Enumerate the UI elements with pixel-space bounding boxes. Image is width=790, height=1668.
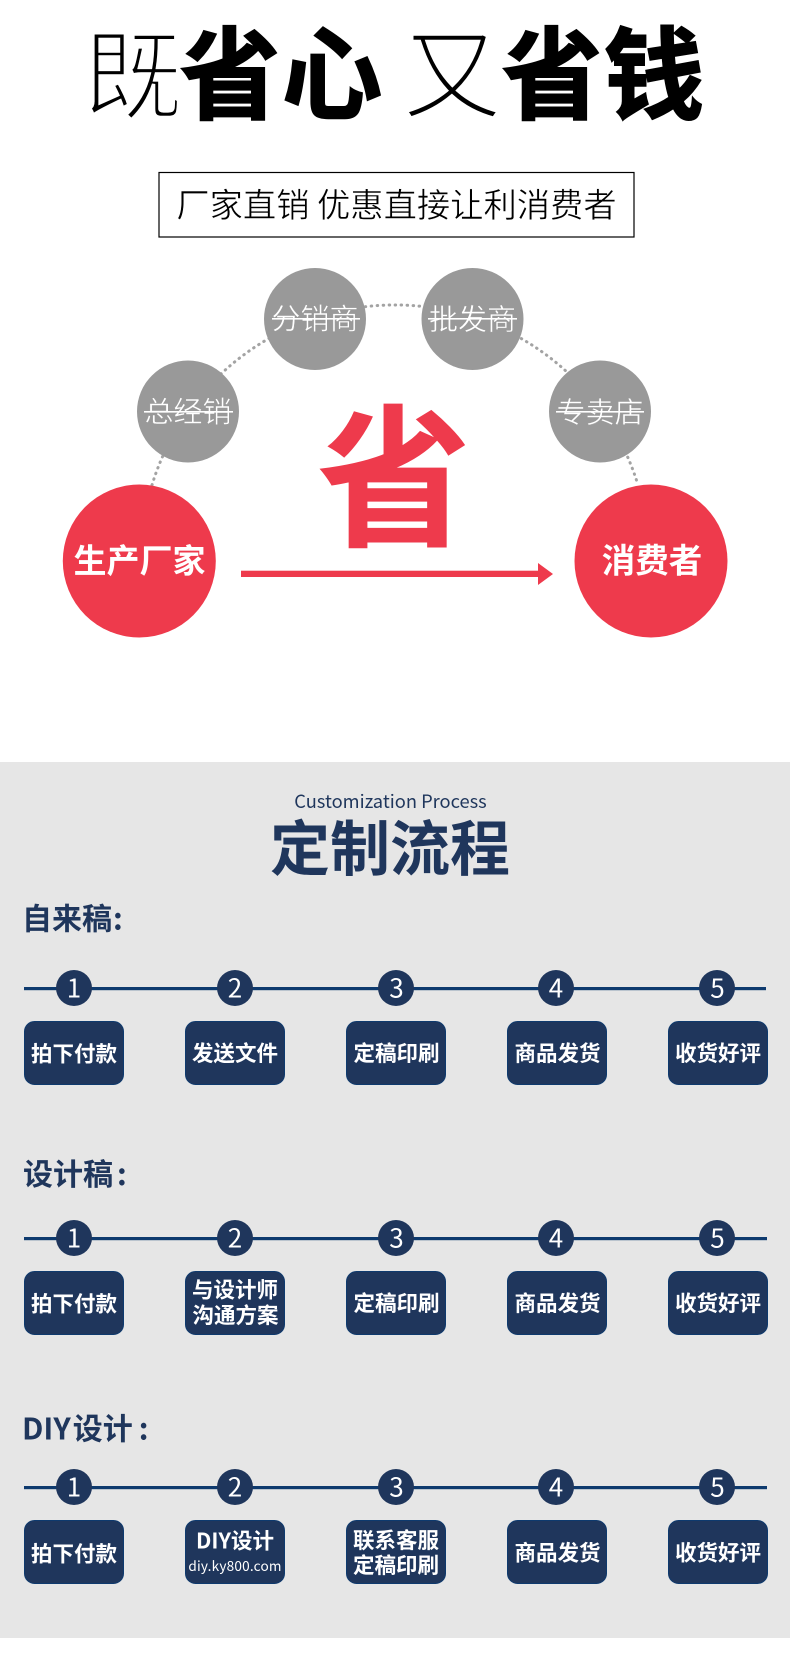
row 1 timeline: 2 <box>228 968 242 1006</box>
row 2 timeline: 1 <box>67 1218 81 1256</box>
circle: 总经销 <box>137 360 239 462</box>
row 1 steps: 发送文件 <box>192 1037 278 1068</box>
row 3 steps: 商品发货 <box>514 1536 601 1568</box>
circle: 总经销: 总经销 <box>144 389 232 431</box>
row 3 steps: 定稿印刷 <box>353 1549 439 1580</box>
row 2 steps: 收货好评 <box>675 1287 761 1318</box>
row 3 title: DIY设计: <box>22 1404 148 1448</box>
row 2 steps: 与设计师 <box>192 1274 278 1304</box>
panel: customization process <box>0 762 790 1638</box>
row 1 timeline: 3 <box>389 968 404 1006</box>
row 3 steps <box>24 1520 768 1584</box>
row 3 timeline: 1 <box>67 1468 81 1504</box>
row 1 timeline: 4 <box>549 968 563 1006</box>
title <box>83 0 704 140</box>
big character 省: 省 <box>317 358 471 579</box>
row 2 timeline: 4 <box>549 1218 563 1256</box>
row 3 timeline <box>24 1468 767 1505</box>
row 1 timeline: 1 <box>67 968 81 1006</box>
row 2 steps: 沟通方案 <box>192 1299 279 1330</box>
circle: 分销商 <box>264 268 366 370</box>
row 1 timeline: 5 <box>710 968 725 1006</box>
circle: 消费者 <box>574 484 728 638</box>
row 2 steps: 拍下付款 <box>31 1288 117 1318</box>
row 2 timeline <box>24 1218 767 1256</box>
row 1 title: 自来稿: <box>22 894 123 938</box>
diagram: dotted arc <box>152 305 638 485</box>
row 3 steps: DIY设计 <box>196 1524 274 1556</box>
subtitle box: 厂家直销 优惠直接让利消费者 <box>176 178 617 227</box>
row 1 timeline <box>24 968 766 1006</box>
heading: 定制流程 <box>270 802 510 888</box>
row 1 steps: 定稿印刷 <box>353 1037 440 1068</box>
row 2 timeline: 2 <box>228 1218 242 1256</box>
row 3 steps: 收货好评 <box>675 1536 761 1568</box>
circle: 消费者: 消费者 <box>602 534 702 582</box>
row 1 steps: 拍下付款 <box>31 1038 117 1068</box>
arrow <box>241 563 553 585</box>
row 3 timeline: 4 <box>549 1468 563 1504</box>
row 3 steps: 拍下付款 <box>31 1538 117 1568</box>
row 1 steps: 收货好评 <box>675 1037 761 1068</box>
row 3 timeline: 5 <box>710 1468 725 1504</box>
row 2 steps: 定稿印刷 <box>353 1287 440 1318</box>
circle: 分销商: 分销商 <box>271 296 359 338</box>
circle: 生产厂家 <box>63 484 216 638</box>
row 2 timeline: 5 <box>710 1218 725 1256</box>
circle: 生产厂家: 生产厂家 <box>74 534 206 582</box>
row 2 timeline: 3 <box>389 1218 404 1256</box>
row 1 steps <box>24 1022 768 1084</box>
row 2 title: 设计稿: <box>23 1150 127 1194</box>
circle: 专卖店: 专卖店 <box>556 390 644 432</box>
row 1 steps: 商品发货 <box>514 1037 601 1068</box>
row 3 steps: diy.ky800.com <box>188 1555 282 1575</box>
english heading: Customization Process <box>294 788 487 814</box>
row 2 steps <box>24 1272 768 1334</box>
circle: 批发商 <box>422 268 524 370</box>
circle: 批发商: 批发商 <box>429 296 516 338</box>
row 3 steps: 联系客服 <box>353 1524 439 1555</box>
row 2 steps: 商品发货 <box>514 1287 601 1318</box>
row 3 timeline: 2 <box>228 1468 242 1504</box>
row 3 timeline: 3 <box>389 1468 404 1504</box>
circle: 专卖店 <box>549 360 651 462</box>
